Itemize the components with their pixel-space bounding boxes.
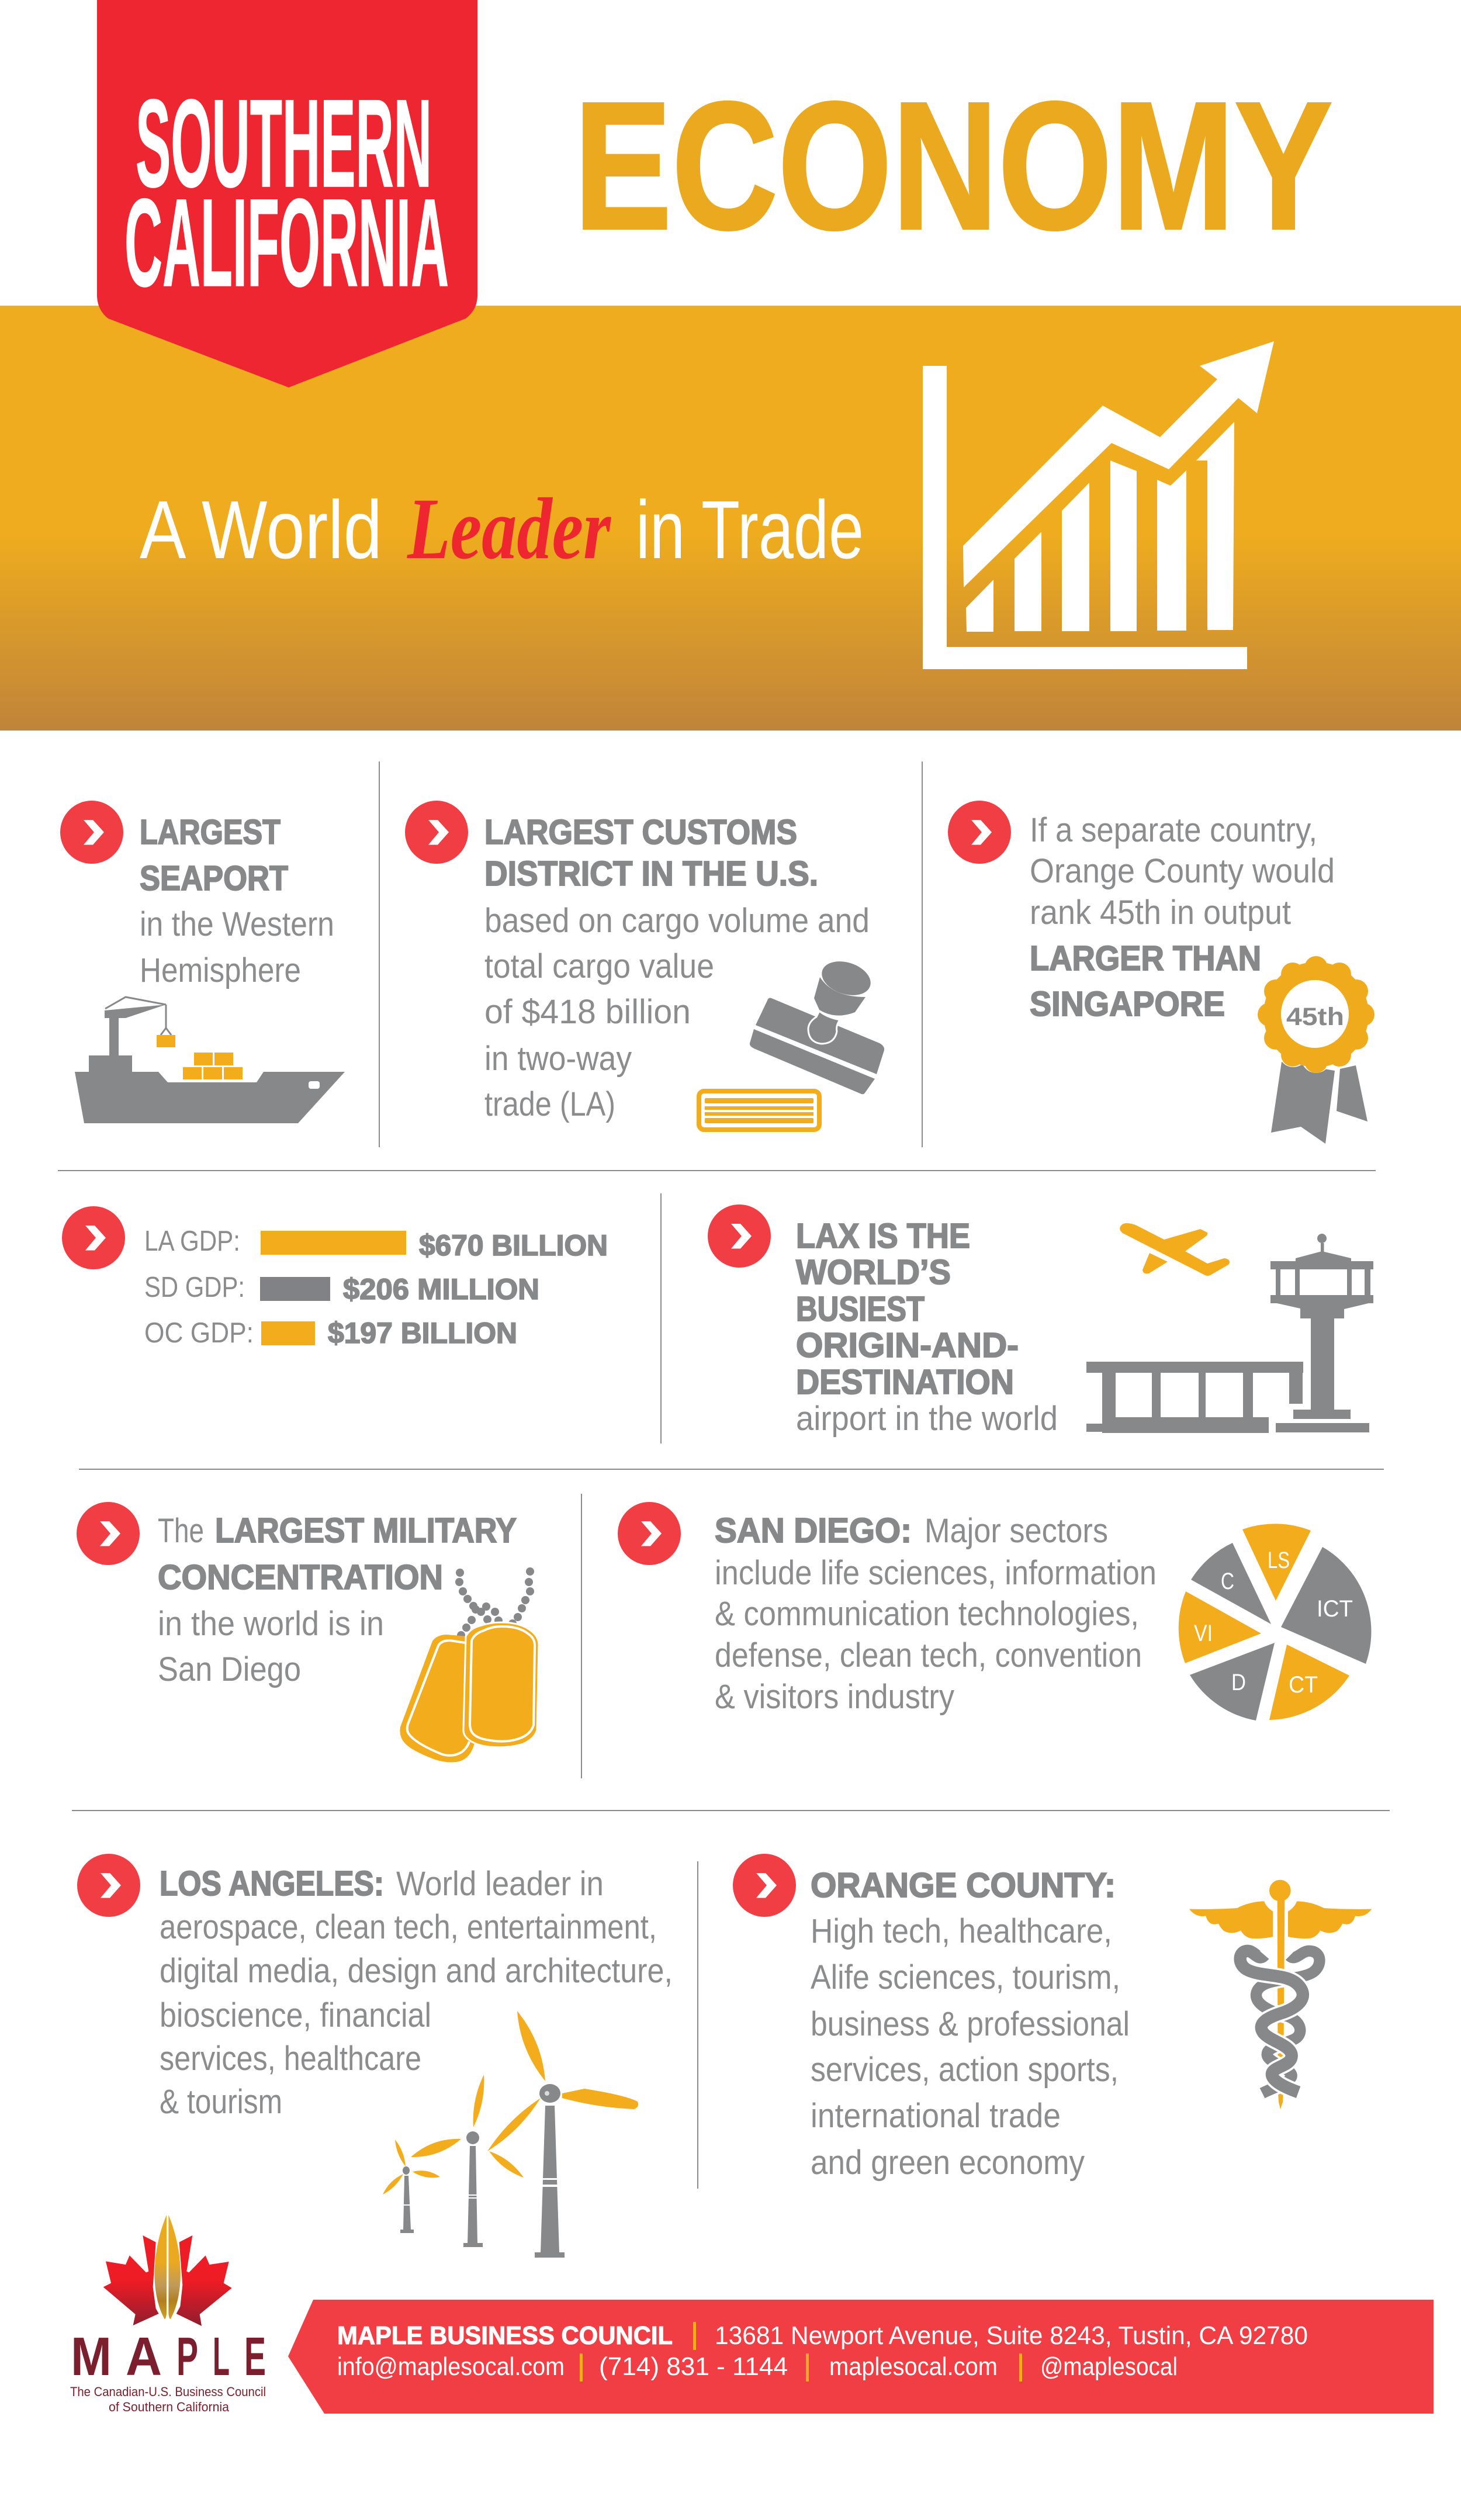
bullet	[62, 1206, 125, 1269]
icon: caduceus	[1189, 1880, 1372, 2109]
tagline: a world leader in trade	[140, 480, 864, 577]
tagline: a world leader in trade: Leader	[406, 480, 611, 577]
bar: sd gdp: $206 MILLION	[343, 1273, 539, 1306]
chart: sector pie: LS	[1268, 1548, 1290, 1573]
logo tagline: of Southern California	[109, 2400, 230, 2414]
tagline: a world leader in trade: A World	[140, 483, 382, 576]
chart: sector pie: ICT	[1317, 1596, 1353, 1622]
panel: orange county larger than singapore	[948, 801, 1375, 1144]
military text: CONCENTRATION	[158, 1558, 443, 1597]
bullet	[708, 1204, 771, 1268]
bullet	[77, 1502, 140, 1565]
bar: la gdp	[144, 1226, 608, 1262]
orange county sectors text: services, action sports,	[811, 2051, 1119, 2089]
military text: The	[158, 1512, 204, 1550]
wordmark: A	[126, 2326, 162, 2387]
panel: largest customs district	[405, 801, 884, 1130]
panel: gdp bar chart	[62, 1206, 608, 1349]
los angeles text: bioscience, financial	[160, 1996, 431, 2034]
bar: sd gdp	[144, 1272, 539, 1306]
icon: award rosette 45th: 45th	[1286, 1003, 1344, 1031]
footer contact band: (714) 831 - 1144	[599, 2352, 788, 2381]
seaport text: Hemisphere	[140, 951, 301, 989]
footer contact band: info@maplesocal.com	[337, 2352, 565, 2381]
footer contact band: maplesocal.com	[829, 2352, 998, 2381]
wordmark: E	[244, 2326, 266, 2387]
icon: airplane	[1120, 1223, 1230, 1276]
military text	[158, 1511, 517, 1688]
icon: dog tags	[400, 1567, 539, 1762]
hero banner background	[0, 306, 1461, 731]
text: CALIFORNIA	[124, 173, 449, 313]
red ribbon with region title	[97, 0, 477, 387]
los angeles text: digital media, design and architecture,	[160, 1952, 673, 1990]
customs text: trade (LA)	[484, 1085, 615, 1123]
lax text	[796, 1217, 1058, 1438]
icon: award rosette 45th	[1258, 956, 1375, 1144]
orange county sectors text: business & professional	[811, 2005, 1130, 2043]
san diego text: & communication technologies,	[715, 1595, 1139, 1633]
panel: largest seaport	[60, 801, 345, 1123]
orange county sectors text: Alife sciences, tourism,	[811, 1958, 1120, 1996]
lax text: ORIGIN-AND-	[796, 1326, 1019, 1365]
san diego text: defense, clean tech, convention	[715, 1636, 1142, 1674]
panel: orange county	[733, 1854, 1372, 2182]
footer contact band: @maplesocal	[1040, 2352, 1178, 2381]
bar: sd gdp: SD GDP:	[144, 1272, 245, 1303]
tagline: a world leader in trade: in Trade	[636, 483, 864, 576]
icon: rubber stamp	[750, 956, 884, 1094]
orange county sectors text: international trade	[811, 2097, 1061, 2135]
los angeles text: aerospace, clean tech, entertainment,	[160, 1908, 657, 1946]
bullet	[405, 801, 468, 864]
bullet	[77, 1854, 140, 1917]
san diego text: & visitors industry	[715, 1678, 954, 1716]
customs text: LARGEST CUSTOMS	[484, 813, 797, 851]
military text: San Diego	[158, 1650, 301, 1688]
orange county sectors text: High tech, healthcare,	[811, 1912, 1112, 1950]
bar: la gdp: LA GDP:	[144, 1226, 240, 1257]
panel: san diego sectors	[618, 1502, 1371, 1721]
orange county text: If a separate country,	[1030, 811, 1317, 849]
icon: maple leaf with surfboard	[103, 2215, 232, 2326]
san diego text: SAN DIEGO:	[715, 1511, 912, 1550]
panel: largest military concentration	[77, 1502, 539, 1762]
bar: la gdp: $670 BILLION	[419, 1229, 608, 1262]
text: SOUTHERN	[136, 74, 432, 213]
seaport text	[140, 813, 334, 989]
wordmark: L	[213, 2326, 230, 2387]
chart: sector pie: VI	[1194, 1621, 1213, 1646]
footer contact band	[288, 2300, 1434, 2414]
military text: LARGEST MILITARY	[215, 1511, 517, 1550]
bar: oc gdp: OC GDP:	[144, 1317, 254, 1349]
customs text: in two-way	[484, 1040, 632, 1078]
lax text: airport in the world	[796, 1400, 1058, 1438]
footer contact band: MAPLE BUSINESS COUNCIL	[337, 2321, 673, 2350]
los angeles text	[160, 1864, 673, 2121]
icon: control tower and terminal	[1086, 1234, 1373, 1433]
lax text: WORLD’S	[796, 1253, 951, 1292]
orange county text: SINGAPORE	[1030, 985, 1225, 1023]
los angeles text: & tourism	[160, 2083, 282, 2121]
los angeles text: LOS ANGELES:	[160, 1864, 384, 1903]
footer contact band: 13681 Newport Avenue, Suite 8243, Tustin, CA 92780	[715, 2321, 1308, 2350]
los angeles text: World leader in	[396, 1865, 604, 1903]
bar: oc gdp: $197 BILLION	[328, 1317, 517, 1349]
orange county text: LARGER THAN	[1030, 939, 1261, 978]
customs text: of $418 billion	[484, 993, 691, 1031]
san diego text: include life sciences, information	[715, 1554, 1157, 1592]
los angeles text: services, healthcare	[160, 2040, 421, 2078]
wordmark: P	[176, 2326, 198, 2387]
customs text: total cargo value	[484, 947, 714, 985]
bullet	[618, 1502, 681, 1565]
icon: wind turbines	[383, 2011, 638, 2258]
icon: cargo ship	[75, 997, 345, 1123]
customs text	[484, 813, 870, 1123]
logo tagline: The Canadian-U.S. Business Council	[70, 2384, 266, 2399]
chart: sector pie: CT	[1289, 1672, 1318, 1698]
seaport text: SEAPORT	[140, 859, 288, 898]
orange county text: Orange County would	[1030, 852, 1335, 890]
san diego text: Major sectors	[925, 1512, 1108, 1550]
wordmark: M	[71, 2326, 112, 2387]
lax text: DESTINATION	[796, 1363, 1014, 1401]
panel: lax airport	[708, 1204, 1373, 1438]
panel: los angeles	[77, 1854, 673, 2258]
lax text: BUSIEST	[796, 1290, 925, 1328]
chart: sector pie: D	[1231, 1670, 1246, 1695]
orange county sectors text	[811, 1866, 1130, 2182]
orange county text	[1030, 811, 1335, 1023]
wordmark	[71, 2326, 266, 2387]
orange county sectors text: ORANGE COUNTY:	[811, 1866, 1116, 1905]
lax text: LAX IS THE	[796, 1217, 970, 1255]
bullet	[733, 1854, 796, 1917]
seaport text: LARGEST	[140, 813, 281, 851]
chart: sector pie: C	[1221, 1569, 1234, 1594]
customs text: based on cargo volume and	[484, 902, 870, 940]
san diego text	[715, 1511, 1157, 1716]
orange county text: rank 45th in output	[1030, 894, 1291, 932]
military text: in the world is in	[158, 1605, 384, 1643]
icon: rising bar chart with arrow	[923, 341, 1274, 669]
logo tagline	[70, 2384, 266, 2414]
bullet	[948, 801, 1011, 864]
seaport text: in the Western	[140, 905, 334, 943]
chart: sector pie	[1179, 1524, 1371, 1721]
bullet	[60, 801, 123, 864]
icon: ink pad	[699, 1091, 819, 1130]
logo: maple business council	[70, 2215, 266, 2414]
orange county sectors text: and green economy	[811, 2144, 1085, 2182]
customs text: DISTRICT IN THE U.S.	[484, 854, 818, 893]
bar: oc gdp	[144, 1317, 517, 1349]
